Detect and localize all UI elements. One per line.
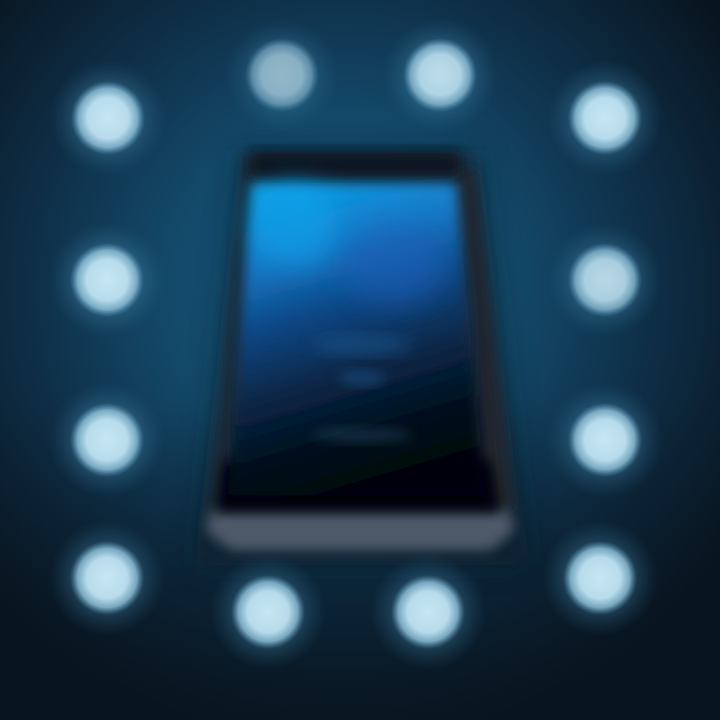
dot 9 [49,520,165,636]
dot 4 [547,60,663,176]
screen highlight [253,183,337,267]
dot 5 [49,222,165,338]
phone right side [458,170,512,510]
screen text smudge [312,336,412,354]
dot 6 [547,222,663,338]
phone bottom edge [206,510,514,550]
dot 10 [210,554,326,670]
phone [195,150,530,565]
screen text smudge lower [312,428,412,442]
dot 2 [224,17,340,133]
dot 12 [542,520,658,636]
screen mid glow [345,227,445,303]
phone shadow [195,150,530,565]
phone body [206,155,514,545]
dot 11 [370,554,486,670]
phone screen [228,183,486,495]
screen text smudge small [338,371,386,385]
ring of glowing dots [49,17,663,670]
dot 8 [547,382,663,498]
dot 1 [50,60,166,176]
phone lower bezel [216,460,500,512]
dot 3 [382,17,498,133]
dot 7 [49,382,165,498]
phone top bezel [250,152,460,178]
